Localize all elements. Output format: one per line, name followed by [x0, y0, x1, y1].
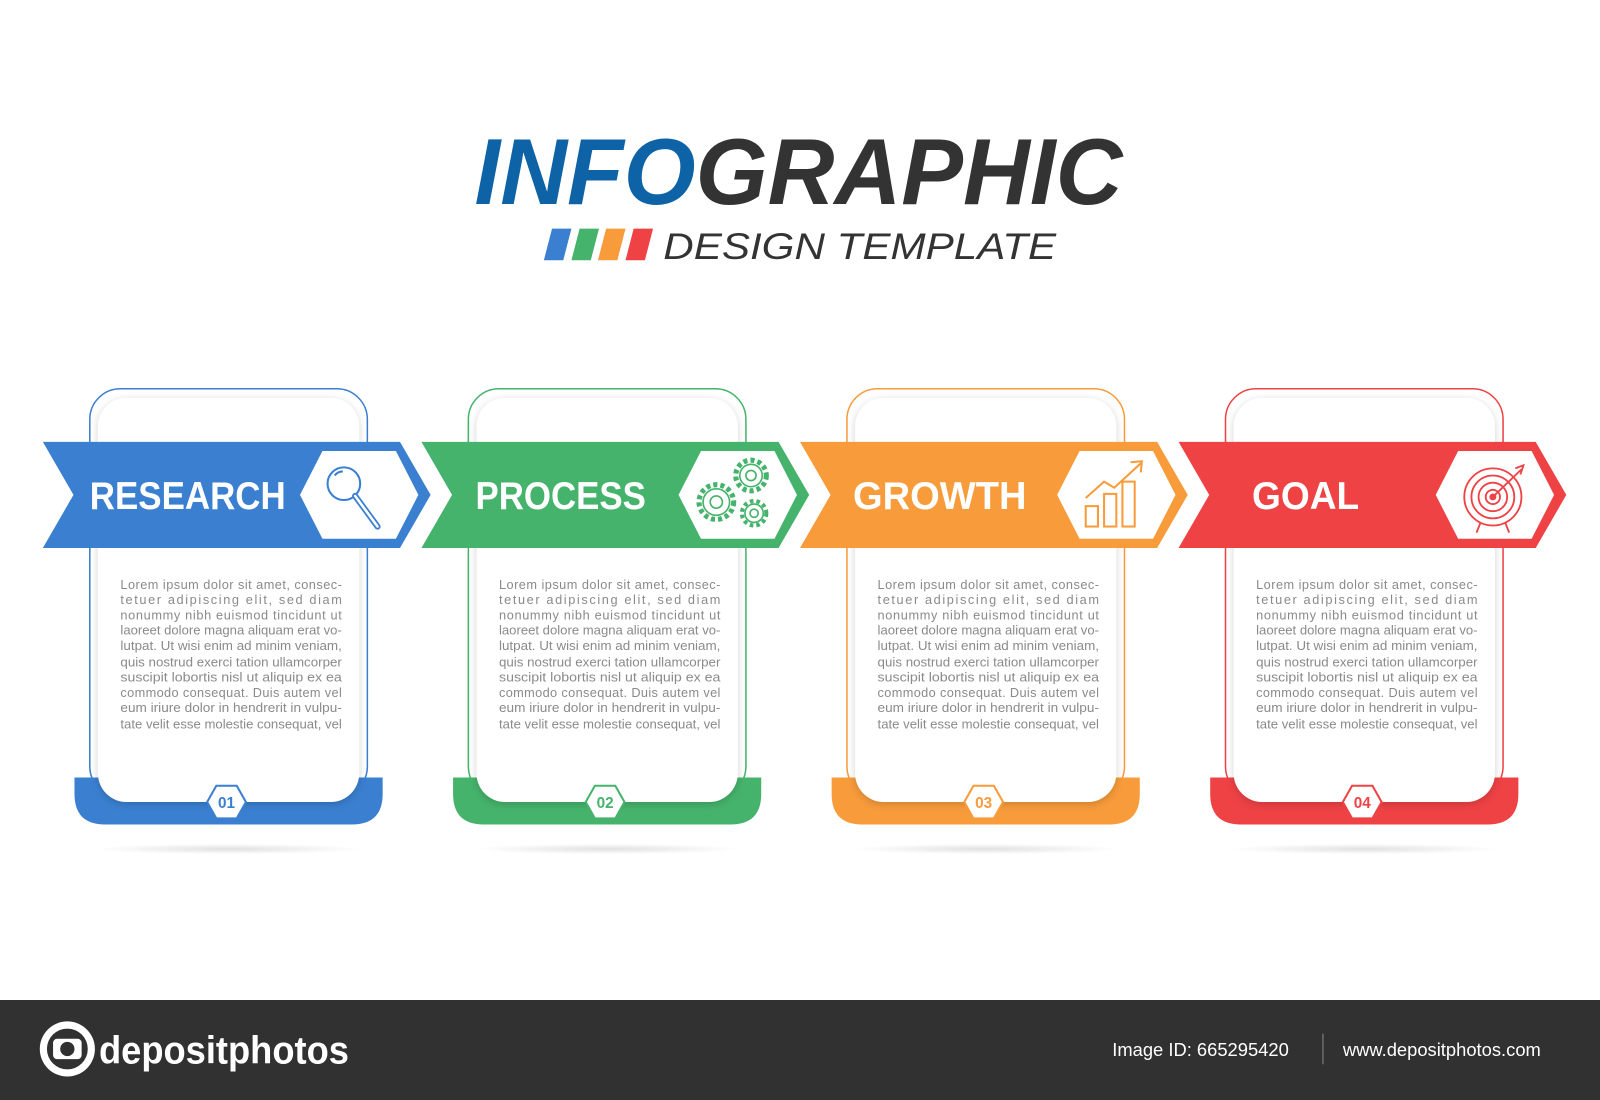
panel: growth	[800, 389, 1188, 854]
text block: research: nonummy nibh euismod tincidunt ut	[120, 607, 342, 622]
panel: research	[43, 389, 431, 854]
text block: growth: suscipit lobortis nisl ut aliquip ex ea	[878, 670, 1100, 685]
subtitle with color stripes	[544, 226, 1057, 267]
text block: process: suscipit lobortis nisl ut aliquip ex ea	[499, 670, 721, 685]
text block: process: eum iriure dolor in hendrerit in vulpu-	[499, 700, 720, 715]
text block: research: tetuer adipiscing elit, sed diam	[120, 592, 342, 607]
banner: research: RESEARCH	[90, 475, 286, 518]
text block: growth: lutpat. Ut wisi enim ad minim veniam,	[878, 638, 1099, 653]
icon: magnifier	[328, 467, 378, 527]
footer bar: www.depositphotos.com	[1342, 1039, 1541, 1060]
text block: research: commodo consequat. Duis autem vel	[120, 685, 342, 700]
text block: process: laoreet dolore magna aliquam erat vo-	[499, 623, 720, 638]
text block: research: eum iriure dolor in hendrerit in vulpu-	[120, 700, 342, 715]
banner: goal	[1179, 442, 1566, 548]
text block: process: tetuer adipiscing elit, sed diam	[499, 592, 720, 607]
number badge 04: 04	[1354, 795, 1371, 812]
text block: growth: tetuer adipiscing elit, sed diam	[878, 592, 1099, 607]
text block: growth: laoreet dolore magna aliquam erat vo-	[878, 623, 1099, 638]
banner: growth: GROWTH	[853, 475, 1027, 518]
text block: growth: quis nostrud exerci tation ullamcorper	[878, 654, 1100, 669]
footer bar	[0, 1000, 1600, 1100]
icon: logo camera	[40, 1021, 95, 1077]
text block: process: quis nostrud exerci tation ullamcorper	[499, 654, 721, 669]
number badge 04	[1343, 786, 1382, 818]
icon: target	[1464, 465, 1523, 533]
number badge 03: 03	[975, 795, 992, 812]
text block: research: Lorem ipsum dolor sit amet, consec-	[120, 577, 342, 592]
icon: growth chart	[1086, 461, 1142, 527]
text block: goal	[1256, 577, 1479, 732]
banner: growth	[800, 442, 1188, 548]
banner: process	[421, 442, 809, 548]
text block: growth	[878, 577, 1100, 732]
banner: process: PROCESS	[476, 475, 646, 518]
text block: growth: Lorem ipsum dolor sit amet, consec-	[878, 577, 1099, 592]
title: INFOGRAPHIC	[474, 119, 1124, 224]
text block: goal: lutpat. Ut wisi enim ad minim veniam,	[1256, 638, 1478, 653]
text block: research: laoreet dolore magna aliquam erat vo-	[120, 623, 342, 638]
text block: process: lutpat. Ut wisi enim ad minim veniam,	[499, 638, 720, 653]
footer bar: Image ID: 665295420	[1112, 1039, 1289, 1060]
panel: goal	[1179, 389, 1566, 854]
text block: goal: quis nostrud exerci tation ullamcorper	[1256, 654, 1478, 669]
text block: process: commodo consequat. Duis autem vel	[499, 685, 720, 700]
text block: goal: laoreet dolore magna aliquam erat vo-	[1256, 623, 1478, 638]
footer bar: depositphotos	[99, 1029, 349, 1072]
text block: goal: commodo consequat. Duis autem vel	[1256, 685, 1478, 700]
text block: process: Lorem ipsum dolor sit amet, consec-	[499, 577, 720, 592]
text block: research	[120, 577, 343, 732]
banner: research	[43, 442, 431, 548]
text block: growth: nonummy nibh euismod tincidunt ut	[878, 607, 1099, 622]
text block: goal: tate velit esse molestie consequat, vel	[1256, 717, 1478, 732]
text block: research: lutpat. Ut wisi enim ad minim veniam,	[120, 638, 342, 653]
panel: process	[421, 389, 809, 854]
text block: goal: Lorem ipsum dolor sit amet, consec-	[1256, 577, 1478, 592]
text block: growth: eum iriure dolor in hendrerit in vulpu-	[878, 700, 1099, 715]
number badge 02: 02	[597, 795, 614, 812]
text block: process: nonummy nibh euismod tincidunt ut	[499, 607, 721, 622]
text block: growth: commodo consequat. Duis autem vel	[878, 685, 1099, 700]
text block: goal: suscipit lobortis nisl ut aliquip ex ea	[1256, 670, 1479, 685]
text block: research: tate velit esse molestie consequat, vel	[120, 717, 342, 732]
number badge 01: 01	[218, 795, 236, 812]
text block: research: suscipit lobortis nisl ut aliquip ex ea	[120, 670, 343, 685]
number badge 03	[964, 786, 1003, 818]
text block: research: quis nostrud exerci tation ullamcorper	[120, 654, 343, 669]
text block: process: tate velit esse molestie consequat, vel	[499, 717, 720, 732]
text block: goal: tetuer adipiscing elit, sed diam	[1256, 592, 1478, 607]
banner: goal: GOAL	[1252, 475, 1359, 518]
text block: goal: nonummy nibh euismod tincidunt ut	[1256, 607, 1478, 622]
text block: goal: eum iriure dolor in hendrerit in vulpu-	[1256, 700, 1478, 715]
subtitle with color stripes: DESIGN TEMPLATE	[663, 226, 1057, 267]
number badge 02	[586, 786, 624, 818]
text block: growth: tate velit esse molestie consequat, vel	[878, 717, 1099, 732]
text block: process	[499, 577, 721, 732]
icon: gears	[699, 460, 766, 526]
number badge 01	[207, 786, 246, 818]
